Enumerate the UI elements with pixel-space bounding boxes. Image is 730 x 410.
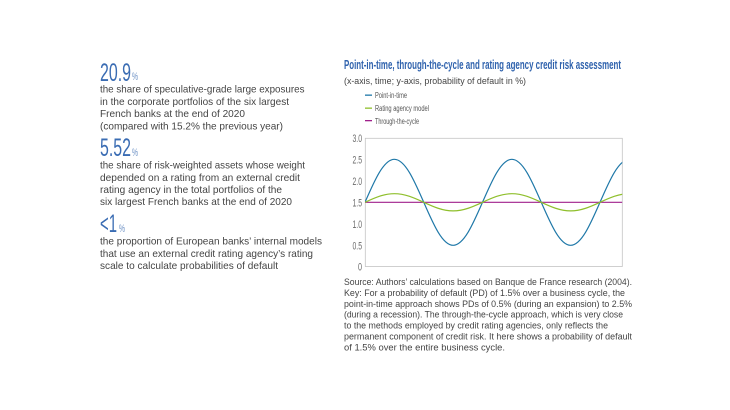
plot frame (365, 138, 622, 266)
y-axis labels: 2.0 (352, 176, 362, 188)
rating agency curve (365, 194, 629, 211)
statistic: 20.9%: % (132, 71, 138, 83)
statistic: 20.9%: 20.9 (100, 59, 131, 87)
through-the-cycle line (365, 202, 622, 203)
legend: Through-the-cycle (375, 117, 419, 126)
statistic: 20.9%: the share of speculative-grade large exposures (100, 84, 304, 96)
chart subtitle: (x-axis, time; y-axis, probability of default in %) (344, 76, 526, 87)
y-axis labels: 1.5 (352, 198, 362, 210)
y-axis labels: 2.5 (352, 154, 362, 166)
statistic: 5.52%: six largest French banks at the end of 2020 (100, 196, 292, 208)
line chart (352, 133, 629, 274)
statistic: less than 1%: <1 (100, 210, 117, 238)
statistic: less than 1%: % (119, 223, 125, 235)
statistic: 20.9%: in the corporate portfolios of the six largest (100, 96, 289, 108)
point-in-time curve (365, 159, 629, 245)
source and key note (344, 277, 632, 354)
source and key note: (during a recession). The through-the-cycle approach, which is very close (344, 310, 623, 320)
legend: Rating agency model (375, 104, 429, 113)
source and key note: point-in-time approach shows PDs of 0.5% (during an expansion) to 2.5% (344, 299, 632, 310)
source and key note: of 1.5% over the entire business cycle. (344, 342, 505, 354)
statistic: 5.52%: depended on a rating from an external credit (100, 172, 300, 184)
source and key note: Source: Authors’ calculations based on Banque de France research (2004). (344, 277, 632, 288)
statistic: 20.9%: (compared with 15.2% the previous year) (100, 120, 283, 132)
statistic: 20.9%: French banks at the end of 2020 (100, 108, 245, 120)
legend: Point-in-time (375, 91, 407, 100)
y-axis labels: 0.5 (352, 240, 362, 252)
statistic: less than 1%: the proportion of European banks’ internal models (100, 236, 322, 248)
y-axis labels: 1.0 (352, 219, 362, 231)
source and key note: Key: For a probability of default (PD) of 1.5% over a business cycle, the (344, 288, 625, 299)
legend (365, 91, 429, 126)
statistic: less than 1%: scale to calculate probabilities of default (100, 260, 278, 272)
statistic: less than 1% (100, 210, 322, 272)
statistic: 5.52%: 5.52 (100, 134, 131, 162)
statistic: 5.52%: rating agency in the total portfolios of the (100, 184, 282, 196)
series lines (365, 159, 629, 245)
y-axis labels: 0 (358, 262, 362, 274)
statistic: 20.9% (100, 59, 304, 132)
statistic: less than 1%: that use an external credit rating agency’s rating (100, 248, 313, 260)
source and key note: permanent component of credit risk. It here shows a probability of default (344, 332, 632, 342)
source and key note: to the methods employed by credit rating agencies, only reflects the (344, 320, 608, 332)
y-axis labels (352, 133, 362, 274)
y-axis labels: 3.0 (352, 133, 362, 145)
statistic: 5.52%: the share of risk-weighted assets whose weight (100, 160, 305, 172)
statistic: 5.52% (100, 134, 305, 208)
statistic: 5.52%: % (132, 147, 138, 159)
